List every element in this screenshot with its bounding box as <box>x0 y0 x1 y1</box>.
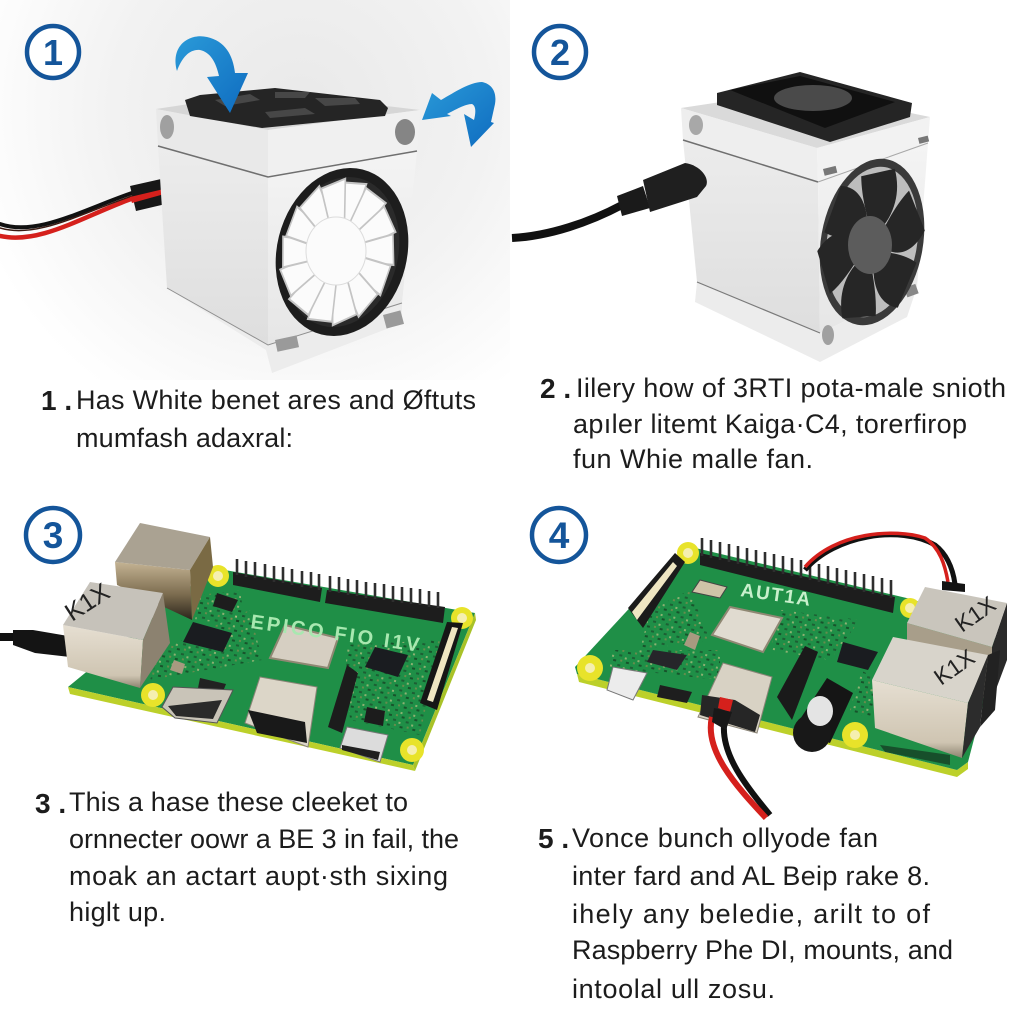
icon: USB port <box>60 578 170 688</box>
badge: number 3: 3 <box>43 515 63 556</box>
arrow: blue curved right <box>422 82 495 147</box>
panel: step 4 <box>532 508 1007 818</box>
cable: red and black wires <box>0 177 170 238</box>
caption: step 3: This a hase these cleeket to <box>69 787 408 817</box>
caption: step 3: higlt up. <box>69 897 166 927</box>
caption: step 1: mumfash adaxral: <box>76 423 293 453</box>
caption: step 1: 1 . <box>41 385 72 416</box>
caption: step 4: Raspberry Phe DI, mounts, and <box>572 935 953 965</box>
icon: white fan module <box>156 88 426 373</box>
caption: step 4: inter fard and AL Beip rake 8. <box>572 861 930 891</box>
caption: step 4: ihely any beledie, arilt to of <box>572 899 930 929</box>
caption: step 3: 3 . <box>35 788 66 819</box>
badge: number 2: 2 <box>550 32 570 73</box>
badge: number 4: 4 <box>549 515 570 556</box>
badge: number 1 <box>27 26 79 78</box>
caption: step 2: fun Whie malle fan. <box>573 444 813 474</box>
icon: fan module with black fan <box>681 72 939 362</box>
caption: step 4: 5 . <box>538 823 569 854</box>
icon: circuit board <box>68 559 476 771</box>
badge: number 2 <box>534 26 586 78</box>
caption: step 2 <box>540 373 1006 474</box>
caption: step 2: 2 . <box>540 373 571 404</box>
icon: ethernet port lower: K1X <box>929 644 979 690</box>
caption: step 3 <box>35 787 459 927</box>
icon: white impeller in black ring <box>258 154 426 350</box>
cable: black power lead <box>512 163 707 238</box>
caption: step 2: Iilery how of 3RTI pota-male sniοth <box>576 373 1006 403</box>
caption: step 1 <box>41 385 476 453</box>
icon: USB port upper <box>907 587 1007 700</box>
icon: ethernet port lower <box>872 637 1000 758</box>
caption: step 4: intoolal ull zosu. <box>572 974 775 1004</box>
panel: step 3 <box>0 508 476 771</box>
arrow: blue curved down <box>176 36 248 113</box>
cable: black power cable <box>0 630 70 657</box>
caption: step 1: Has White benet ares and Øftuts <box>76 385 476 415</box>
icon: fan wire bottom <box>711 697 770 818</box>
caption: step 3: ornnecter oowr a BE 3 in fail, the <box>69 824 459 854</box>
icon: circuit board: AUT1A <box>739 580 812 611</box>
icon: USB port: K1X <box>60 578 115 627</box>
icon: fan wire top <box>805 533 965 592</box>
panel: step 1 <box>0 0 510 380</box>
icon: ethernet port <box>115 523 213 620</box>
icon: USB port upper: K1X <box>950 591 1000 637</box>
badge: number 4 <box>532 508 586 562</box>
badge: number 3 <box>26 508 80 562</box>
caption: step 4: Vonce bunch ollуode fan <box>572 823 878 853</box>
caption: step 3: moak an actart aυpt·ѕth sixing <box>69 861 448 891</box>
icon: circuit board <box>575 538 1000 777</box>
badge: number 1: 1 <box>43 32 63 73</box>
caption: step 2: apıler litemt Kaiga·C4, torerfirop <box>573 409 967 439</box>
icon: barrel connector <box>793 678 853 752</box>
icon: circuit board: EPICO FIO I1V <box>249 611 421 657</box>
icon: black impeller <box>802 150 939 336</box>
panel: step 2 <box>512 26 939 362</box>
caption: step 4 <box>538 823 953 1004</box>
